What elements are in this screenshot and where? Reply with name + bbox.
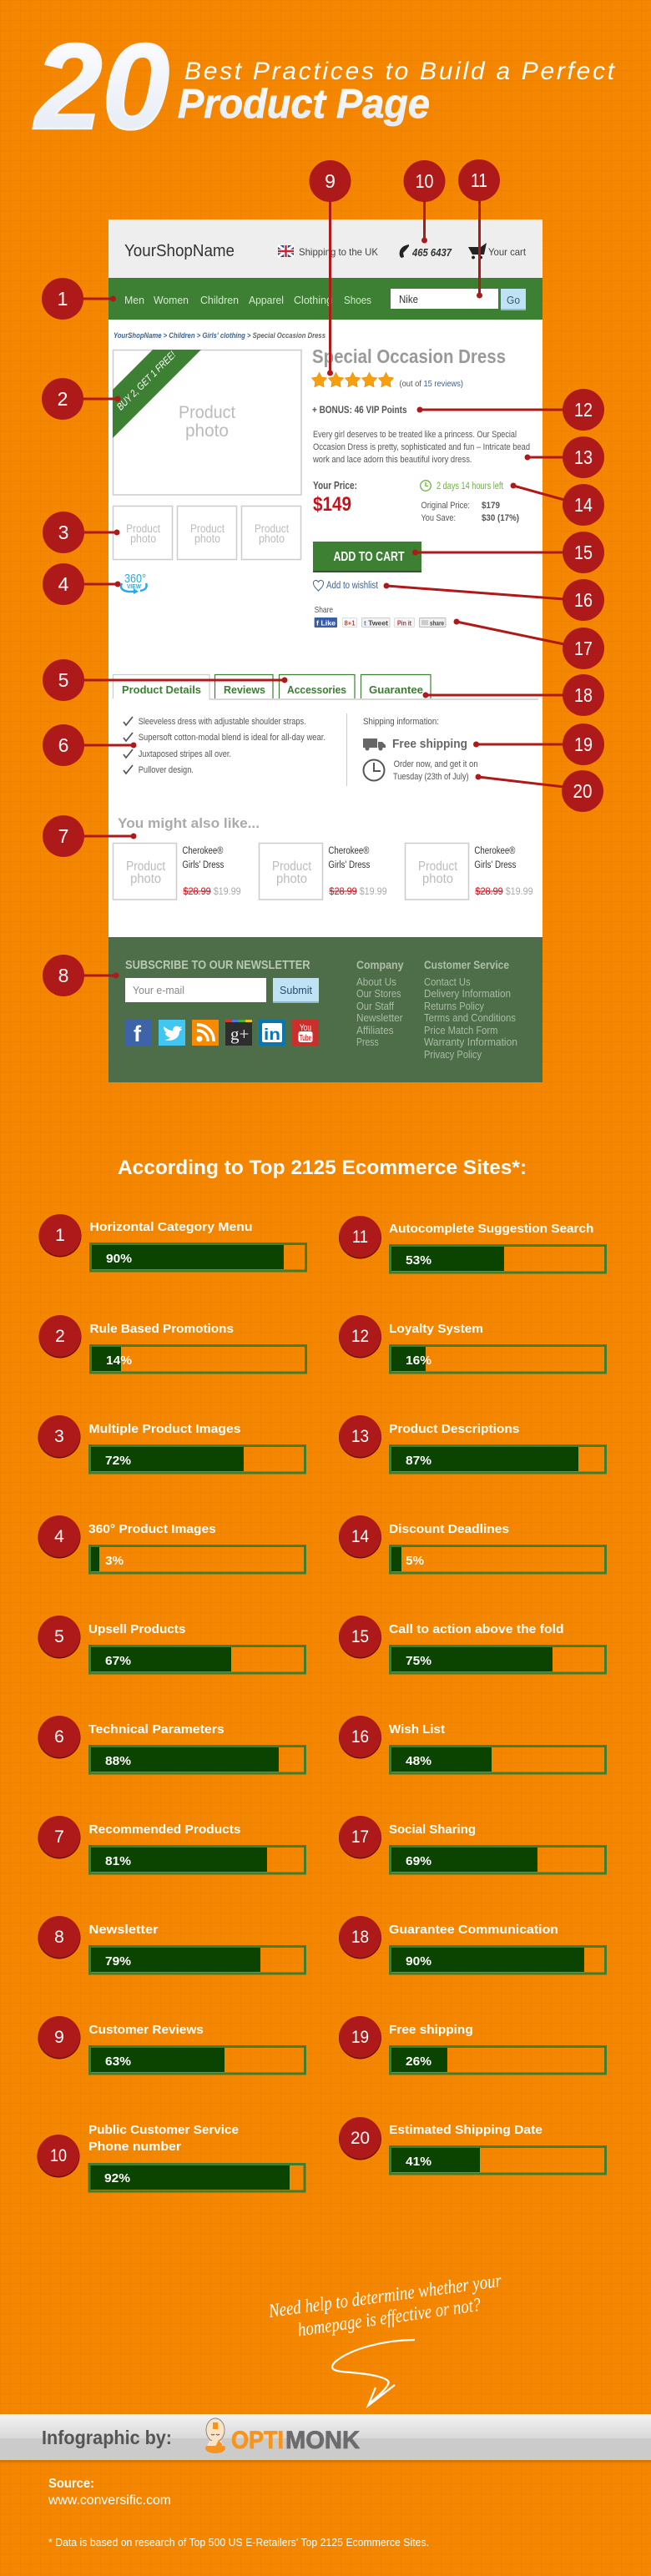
- product description: Occasion Dress is pretty, sophisticated and fun – Intricate bead: [313, 442, 530, 452]
- add to cart button: ADD TO CART: [334, 550, 405, 564]
- tab: guarantee: Guarantee: [369, 683, 423, 696]
- footer column: customer service: Price Match Form: [424, 1024, 497, 1036]
- callout 19: [473, 723, 604, 765]
- footer column: customer service: Warranty Information: [424, 1036, 517, 1048]
- thumbnails: [114, 506, 300, 559]
- callout 17: 17: [574, 638, 593, 659]
- social icons: [125, 1020, 319, 1046]
- source: Source:: [48, 2477, 94, 2491]
- site header: YourShopName: [124, 242, 235, 260]
- tab: accessories: [279, 674, 355, 698]
- shipping information: [347, 713, 478, 786]
- recommended product 3: photo: [422, 872, 453, 886]
- feature list: [124, 717, 326, 775]
- title line 1: Best Practices to Build a Perfect: [184, 58, 616, 85]
- stat 13: product descriptions: 13: [351, 1427, 369, 1446]
- footer column: customer service: Delivery Information: [424, 987, 511, 1000]
- stat 5: upsell products: [38, 1616, 305, 1673]
- stat 19: free shipping: Free shipping: [389, 2023, 473, 2037]
- callout 3: [43, 512, 120, 553]
- stat 13: product descriptions: Product Descriptions: [389, 1422, 519, 1436]
- callout 18: 18: [574, 684, 593, 706]
- stat 18: guarantee communication: Guarantee Communication: [389, 1923, 558, 1937]
- footer column: customer service: Customer Service: [424, 959, 509, 971]
- panel: product page mockup: [108, 219, 542, 1082]
- icon: youtube: Tube: [300, 1034, 311, 1043]
- price block: Original Price:: [421, 501, 470, 511]
- icon: twitter: [159, 1020, 185, 1046]
- stat 7: recommended products: [38, 1816, 305, 1873]
- stat 16: wish list: 16: [351, 1727, 369, 1747]
- stat 8: newsletter: 8: [54, 1928, 64, 1947]
- price block: Your Price:: [313, 480, 357, 492]
- recommended product 3: Girls' Dress: [474, 860, 517, 870]
- wishlist link: Add to wishlist: [326, 581, 379, 591]
- stat 12: loyalty system: [339, 1315, 606, 1373]
- recommended product 3: Cherokee®: [474, 846, 516, 856]
- stat 13: product descriptions: [339, 1415, 606, 1473]
- review count: (out of 15 reviews): [399, 379, 463, 389]
- social share buttons: [315, 605, 446, 628]
- stat 11: autocomplete suggestion search: Autocomplete Suggestion Search: [389, 1222, 593, 1236]
- recommended product 2: Product: [272, 860, 311, 874]
- social share buttons: 8+1: [344, 619, 356, 628]
- callout 15: [412, 532, 604, 573]
- stat 4: 360 product images: 3%: [105, 1554, 124, 1568]
- stat 17: social sharing: [339, 1816, 606, 1873]
- callout 17: [454, 619, 604, 669]
- email input: [125, 978, 266, 1002]
- product description: [312, 430, 530, 465]
- title line 2: Product Page: [178, 82, 430, 127]
- stat 2: rule based promotions: 2: [55, 1327, 65, 1346]
- site header: Shipping to the UK: [299, 246, 378, 258]
- recommended product 2: $19.99: [360, 887, 387, 897]
- recommended products: You might also like...: [118, 815, 260, 831]
- navigation bar: Clothing: [294, 294, 332, 306]
- add to cart button: [313, 542, 421, 572]
- stat 20: estimated shipping date: Estimated Shipping Date: [389, 2123, 542, 2137]
- recommended product 2: $28.99: [329, 887, 357, 897]
- recommended product 3: $19.99: [506, 887, 533, 897]
- price block: 2 days 14 hours left: [437, 481, 504, 492]
- icon: countdown clock: [421, 481, 431, 491]
- stat 11: autocomplete suggestion search: [339, 1216, 606, 1273]
- stat 20: estimated shipping date: 20: [351, 2129, 370, 2148]
- submit button: Submit: [280, 984, 312, 996]
- stat 13: product descriptions: 87%: [406, 1454, 431, 1468]
- icon: facebook: [125, 1020, 152, 1046]
- footer column: customer service: Returns Policy: [424, 1000, 484, 1012]
- recommended product 2: photo: [276, 872, 307, 886]
- callout 10: 10: [416, 170, 434, 192]
- breadcrumb: YourShopName > Children > Girls' clothing > Special Occasion Dress: [114, 331, 326, 340]
- callout 6: [43, 724, 137, 766]
- icon: cart: [468, 243, 487, 259]
- recommended product 3: Product: [418, 860, 457, 874]
- callout 7: 7: [58, 825, 68, 847]
- callout 3: 3: [58, 522, 68, 543]
- navigation bar: [108, 278, 542, 320]
- price block: $30 (17%): [482, 513, 519, 523]
- site header: Your cart: [488, 246, 527, 258]
- price block: $149: [313, 493, 351, 516]
- tab: product details: Product Details: [122, 683, 201, 696]
- main product photo: Product: [179, 403, 235, 422]
- icon: delivery clock: [364, 759, 384, 781]
- shipping information: Free shipping: [392, 738, 467, 751]
- recommended product 1: [114, 843, 241, 900]
- go button: Go: [507, 294, 520, 306]
- stat 10: public customer service phone number: Public Customer Service: [88, 2123, 239, 2137]
- price block: You Save:: [421, 513, 456, 523]
- stat 9: customer reviews: 9: [54, 2028, 64, 2047]
- callout 11: 11: [471, 169, 487, 191]
- source: [48, 2477, 171, 2508]
- product title: Special Occasion Dress: [312, 345, 506, 367]
- optimonk logo text: MONK: [285, 2427, 360, 2454]
- recommended product 2: Cherokee®: [328, 846, 370, 856]
- stat 19: free shipping: [339, 2016, 606, 2074]
- icon: youtube: [292, 1020, 319, 1046]
- callout 20: 20: [573, 780, 593, 802]
- tab: guarantee: [361, 674, 431, 698]
- price block: $179: [482, 501, 500, 511]
- callout 6: 6: [58, 734, 68, 756]
- main product photo: [113, 349, 301, 495]
- stat 12: loyalty system: 16%: [406, 1354, 431, 1368]
- callout 16: [384, 579, 604, 621]
- stat 4: 360 product images: 4: [54, 1527, 64, 1546]
- callout 1: 1: [58, 288, 68, 310]
- stat 2: rule based promotions: 14%: [106, 1354, 132, 1368]
- callout 20: [476, 770, 603, 812]
- social share buttons: f Like: [316, 619, 336, 628]
- stat 12: loyalty system: 12: [351, 1327, 369, 1346]
- footer column: customer service: Privacy Policy: [424, 1048, 482, 1061]
- stats heading: According to Top 2125 Ecommerce Sites*:: [118, 1157, 527, 1179]
- stat 1: horizontal category menu: Horizontal Category Menu: [90, 1220, 252, 1234]
- navigation bar: Men: [124, 294, 144, 306]
- stat 14: discount deadlines: Discount Deadlines: [389, 1522, 509, 1536]
- stat 14: discount deadlines: [339, 1515, 606, 1573]
- recommended product 2: [259, 843, 387, 900]
- stat 10: public customer service phone number: Phone number: [88, 2140, 181, 2154]
- stat 18: guarantee communication: 90%: [406, 1954, 431, 1969]
- navigation bar: Children: [200, 294, 239, 306]
- social share buttons: share: [430, 619, 444, 628]
- stat 17: social sharing: 17: [351, 1827, 369, 1847]
- stat 5: upsell products: Upsell Products: [88, 1622, 185, 1636]
- callout 12: [417, 389, 604, 431]
- stat 18: guarantee communication: 18: [351, 1928, 369, 1947]
- handwritten callout: homepage is effective or not?: [296, 2294, 482, 2340]
- stat 4: 360 product images: 360° Product Images: [88, 1522, 216, 1536]
- email input: Your e-mail: [133, 984, 184, 996]
- recommended product 1: $19.99: [214, 887, 241, 897]
- stat 6: technical parameters: 88%: [105, 1754, 131, 1768]
- stat 15: call to action above the fold: 15: [351, 1627, 369, 1646]
- search box: [391, 289, 498, 309]
- stat 6: technical parameters: [38, 1716, 305, 1773]
- source: www.conversific.com: [48, 2493, 171, 2508]
- stat 20: estimated shipping date: 41%: [406, 2155, 431, 2169]
- navigation bar: Nike: [399, 293, 418, 305]
- social share buttons: t Tweet: [364, 619, 388, 628]
- callout 2: [42, 378, 120, 420]
- feature list: Supersoft cotton-modal blend is ideal for all-day wear.: [139, 733, 326, 743]
- thumbnails: photo: [130, 532, 156, 545]
- callout 12: 12: [574, 399, 593, 421]
- promo ribbon: [113, 349, 201, 438]
- stat 17: social sharing: 69%: [406, 1854, 431, 1868]
- callout 13: [524, 436, 604, 478]
- stat 4: 360 product images: [38, 1515, 305, 1573]
- stat 8: newsletter: Newsletter: [88, 1923, 159, 1937]
- optimonk logo text: OPTI: [231, 2427, 284, 2454]
- tab: reviews: Reviews: [224, 683, 265, 696]
- stat 7: recommended products: 7: [54, 1827, 64, 1847]
- icon: facebook: f: [134, 1021, 142, 1046]
- stat 9: customer reviews: Customer Reviews: [88, 2023, 204, 2037]
- icon: 360 view: 360°: [124, 572, 146, 586]
- thumbnails: Product: [126, 522, 160, 535]
- stat 19: free shipping: 26%: [406, 2054, 431, 2069]
- handwritten callout: Need help to determine whether your: [267, 2270, 503, 2321]
- promo ribbon: BUY 2, GET 1 FREE!: [114, 349, 179, 412]
- submit button: [273, 978, 319, 1003]
- navigation bar: Shoes: [344, 294, 371, 306]
- icon: linkedin: [259, 1020, 285, 1046]
- callout 7: [43, 815, 137, 857]
- footer column: company: [356, 959, 404, 1048]
- shipping information: Order now, and get it on: [394, 759, 478, 769]
- shipping information: Tuesday (23th of July): [393, 772, 469, 782]
- stat 20: estimated shipping date: [339, 2117, 606, 2174]
- thumbnails: Product: [255, 522, 289, 535]
- callout 4: 4: [58, 573, 69, 595]
- recommended product 2: Girls' Dress: [328, 860, 371, 870]
- stat 1: horizontal category menu: [38, 1214, 305, 1271]
- icon: linkedin: in: [264, 1026, 280, 1044]
- icon: google plus: g+: [230, 1024, 249, 1044]
- title number 20: 20: [33, 18, 169, 154]
- stat 7: recommended products: Recommended Products: [88, 1822, 240, 1837]
- tab: accessories: Accessories: [287, 683, 346, 696]
- tab: product details: [114, 674, 209, 699]
- callout 14: [511, 482, 604, 526]
- callout 9: 9: [325, 170, 336, 192]
- product description: work and lace adorn this beautiful ivory dress.: [312, 455, 472, 465]
- newsletter heading: SUBSCRIBE TO OUR NEWSLETTER: [125, 959, 310, 972]
- footer column: customer service: Terms and Conditions: [424, 1011, 516, 1024]
- thumbnails: photo: [194, 532, 220, 545]
- optimonk logo text: [231, 2427, 360, 2454]
- recommended products: [114, 815, 533, 900]
- stat 19: free shipping: 19: [351, 2028, 369, 2047]
- footer column: company: Newsletter: [356, 1011, 403, 1024]
- callout 8: 8: [58, 965, 68, 986]
- stat 15: call to action above the fold: [339, 1616, 606, 1673]
- footnote: * Data is based on research of Top 500 US E-Retailers' Top 2125 Ecommerce Sites.: [48, 2536, 429, 2548]
- wishlist link: [313, 580, 379, 591]
- icon: truck: [363, 739, 386, 751]
- stat 2: rule based promotions: [38, 1315, 305, 1373]
- handwritten callout: [267, 2270, 503, 2340]
- callout 15: 15: [574, 542, 593, 563]
- stat 6: technical parameters: Technical Parameters: [88, 1722, 225, 1737]
- mockup white page: [108, 219, 542, 937]
- navigation bar: Apparel: [249, 294, 284, 306]
- site header: 465 6437: [411, 246, 452, 259]
- recommended product 1: Product: [126, 860, 166, 874]
- recommended product 3: $28.99: [475, 887, 503, 897]
- credit band: [0, 2414, 651, 2463]
- callout 4: [43, 563, 120, 605]
- stat 11: autocomplete suggestion search: 53%: [406, 1253, 431, 1268]
- thumbnails: Product: [190, 522, 225, 535]
- go button: [501, 289, 526, 310]
- stat 3: multiple product images: [38, 1415, 305, 1473]
- product tabs: [114, 674, 538, 699]
- stat 2: rule based promotions: Rule Based Promotions: [90, 1322, 234, 1336]
- arrow: [332, 2340, 415, 2406]
- stat 7: recommended products: 81%: [105, 1854, 131, 1868]
- stat 11: autocomplete suggestion search: 11: [352, 1228, 368, 1247]
- icon: phone: [400, 244, 409, 258]
- footer column: company: Company: [356, 959, 404, 971]
- icon: 360 view: VIEW: [127, 584, 141, 590]
- footer column: customer service: Contact Us: [424, 975, 471, 988]
- icon: google plus: [225, 1020, 252, 1046]
- site header: [108, 219, 542, 278]
- stat 17: social sharing: Social Sharing: [389, 1822, 476, 1837]
- stat 12: loyalty system: Loyalty System: [389, 1322, 483, 1336]
- stat 9: customer reviews: [38, 2016, 305, 2074]
- icon: 360 view: [121, 572, 147, 594]
- site footer: [108, 937, 542, 1082]
- navigation bar: Women: [154, 294, 189, 306]
- recommended product 3: [406, 843, 533, 900]
- stat 1: horizontal category menu: 1: [55, 1226, 65, 1245]
- shipping information: Shipping information:: [363, 717, 439, 727]
- footer column: customer service: [424, 959, 517, 1061]
- stat 10: public customer service phone number: 10: [50, 2146, 67, 2165]
- callout 10: [404, 160, 446, 244]
- stat 15: call to action above the fold: Call to action above the fold: [389, 1622, 564, 1636]
- footer column: company: Affiliates: [356, 1024, 394, 1036]
- feature list: Sleeveless dress with adjustable shoulder straps.: [139, 717, 306, 727]
- product description: Every girl deserves to be treated like a princess. Our Special: [313, 430, 517, 440]
- stat 14: discount deadlines: 14: [351, 1527, 369, 1546]
- feature list: Juxtaposed stripes all over.: [139, 749, 231, 759]
- callout 1: [42, 278, 116, 320]
- callout 5: [43, 659, 287, 701]
- recommended product 1: Cherokee®: [182, 846, 224, 856]
- callout 11: [458, 159, 500, 299]
- stat 8: newsletter: [38, 1916, 305, 1974]
- stat 9: customer reviews: 63%: [105, 2054, 131, 2069]
- stat 8: newsletter: 79%: [105, 1954, 131, 1969]
- callout 13: 13: [574, 446, 593, 468]
- social share buttons: Pin it: [397, 619, 411, 628]
- callout 18: [422, 674, 604, 716]
- recommended product 1: Girls' Dress: [182, 860, 225, 870]
- recommended product 1: $28.99: [183, 887, 211, 897]
- social share buttons: Share: [315, 605, 333, 615]
- icon: UK flag: [278, 245, 294, 257]
- stat 5: upsell products: 5: [54, 1627, 64, 1646]
- bonus points: + BONUS: 46 VIP Points: [312, 404, 407, 416]
- stat 15: call to action above the fold: 75%: [406, 1654, 431, 1668]
- callout 9: [309, 160, 351, 376]
- callout 2: 2: [58, 388, 68, 410]
- infographic by label: Infographic by:: [42, 2427, 172, 2448]
- footer column: company: Our Staff: [356, 1000, 394, 1012]
- stat 5: upsell products: 67%: [105, 1654, 131, 1668]
- callout 5: 5: [58, 669, 68, 691]
- callout 14: 14: [574, 494, 593, 516]
- footer column: company: Press: [356, 1036, 379, 1048]
- recommended product 1: photo: [130, 872, 161, 886]
- main product photo: photo: [185, 421, 229, 441]
- stat 10: public customer service phone number: 92%: [104, 2171, 130, 2185]
- stat 3: multiple product images: 3: [54, 1427, 64, 1446]
- stat 16: wish list: [339, 1716, 606, 1773]
- stat 16: wish list: 48%: [406, 1754, 431, 1768]
- tab: reviews: [215, 674, 273, 698]
- callout 19: 19: [574, 733, 593, 755]
- stat 14: discount deadlines: 5%: [406, 1554, 424, 1568]
- rating stars: [311, 372, 394, 387]
- icon: rss: [192, 1020, 219, 1046]
- callout 16: 16: [574, 589, 593, 611]
- footer column: company: Our Stores: [356, 987, 401, 1000]
- feature list: Pullover design.: [139, 765, 194, 775]
- stat 3: multiple product images: 72%: [105, 1454, 131, 1468]
- icon: youtube: You: [300, 1023, 311, 1033]
- stat 10: public customer service phone number: [37, 2123, 305, 2191]
- icon: monk mascot: [205, 2418, 225, 2453]
- thumbnails: photo: [259, 532, 285, 545]
- footer column: company: About Us: [356, 975, 396, 988]
- title: [33, 18, 616, 154]
- stat 1: horizontal category menu: 90%: [106, 1252, 132, 1266]
- stat 18: guarantee communication: [339, 1916, 606, 1974]
- stat 3: multiple product images: Multiple Product Images: [88, 1422, 240, 1436]
- callout 8: [43, 955, 119, 996]
- stat 16: wish list: Wish List: [389, 1722, 445, 1737]
- stat 6: technical parameters: 6: [54, 1727, 64, 1747]
- price block: [313, 480, 519, 523]
